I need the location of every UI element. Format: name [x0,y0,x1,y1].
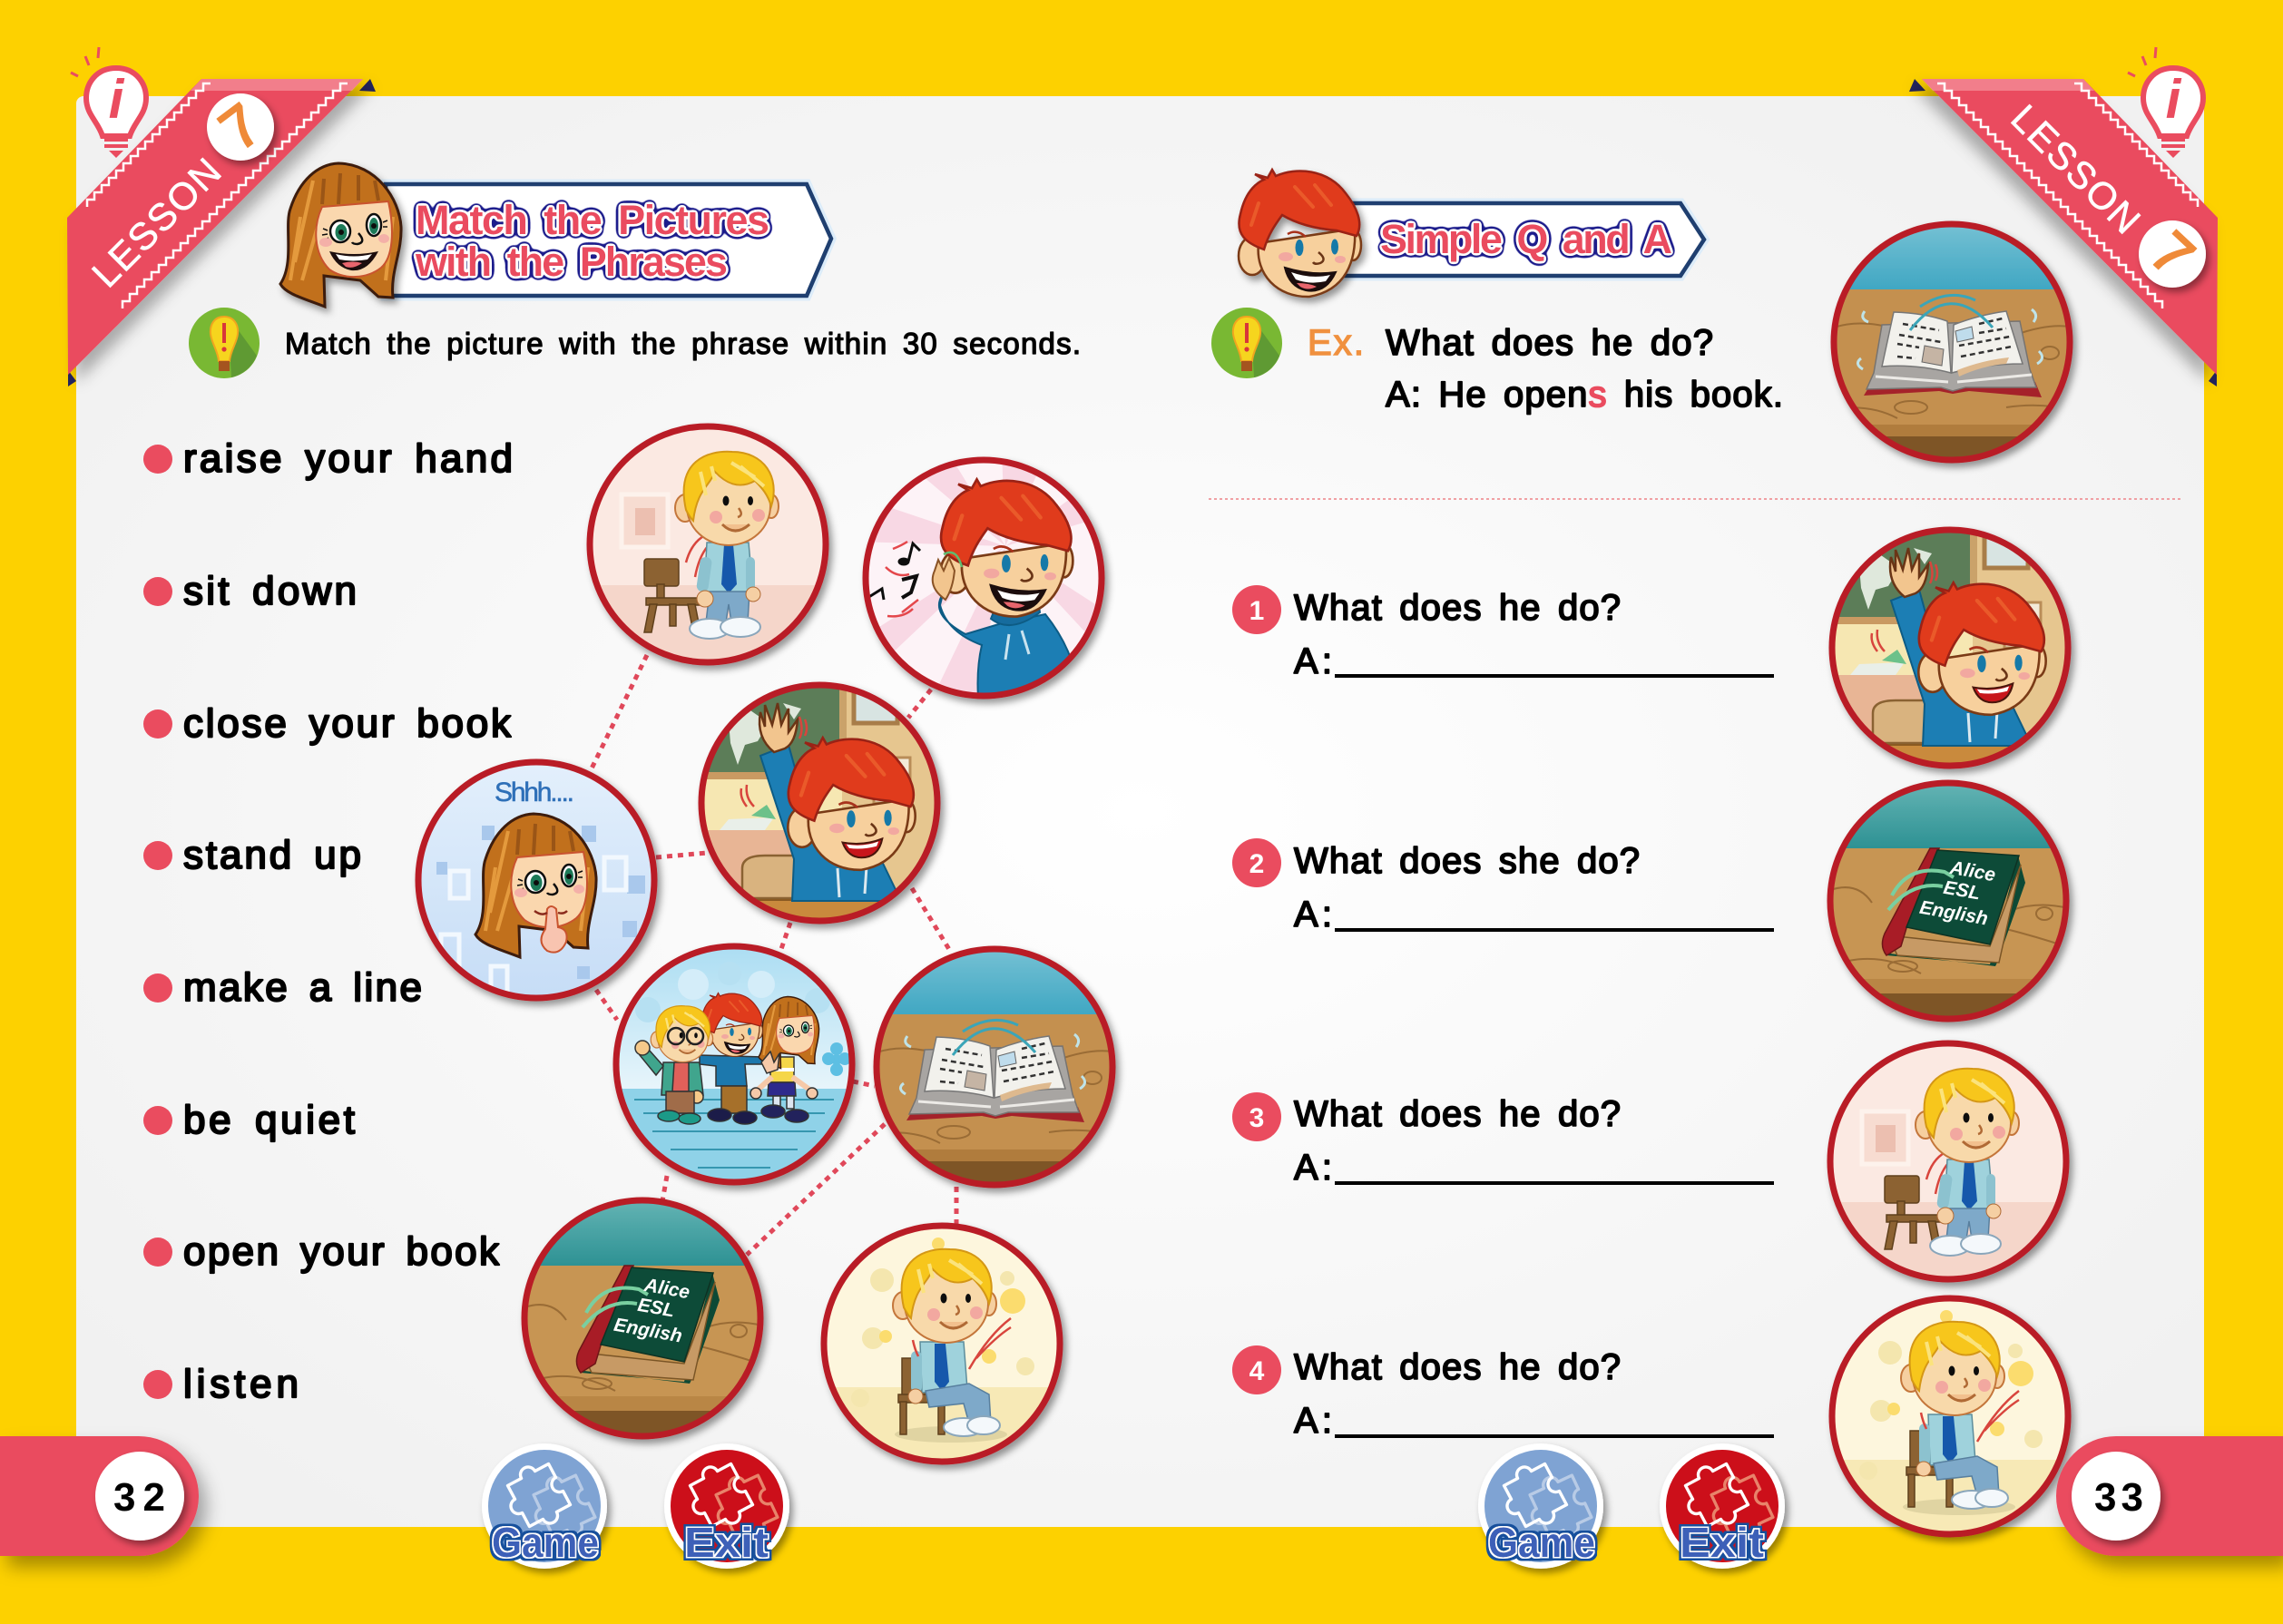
ribbon label: LESSON: LESSON [83,150,230,296]
ribbon label: LESSON: LESSON [2003,96,2149,242]
page number tab left: 32 [113,1475,165,1520]
phrase list [143,436,513,1406]
instruction text: Match the picture with the phrase within 30 seconds. [285,327,1081,360]
question 2: What does she do? [1294,841,1640,881]
button: exit left [664,1443,789,1569]
phrase: open your book: open your book [183,1229,500,1274]
phrase: listen: listen [183,1362,299,1406]
picture: closed book [515,1191,769,1450]
lesson number circle: 7 [2138,220,2207,289]
book title [1919,862,1994,925]
question 4: What does he do? [1294,1347,1621,1387]
question 3 [1232,1092,1774,1188]
phrase: be quiet: be quiet [183,1098,355,1142]
speech text: Shhh: Shhh.... [495,778,574,807]
button label: Game [492,1519,599,1566]
picture: boy raises hand [692,676,946,930]
icon: green hint bulb right [1211,308,1282,378]
icon: left info bulb: i [109,69,125,130]
question 1 [1232,585,1774,681]
question 3: What does he do? [1294,1094,1621,1134]
question 2: A: [1294,895,1332,934]
heading text: Match the Pictures [416,197,769,243]
picture: answer 4 sits down [1823,1289,2077,1551]
button: game left [482,1443,607,1569]
icon: right info bulb: i [2166,69,2182,130]
picture: boy listens [857,451,1111,705]
page number tab right [2056,1436,2283,1556]
question 1: What does he do? [1294,588,1621,628]
picture: answer 2 closed book [1821,774,2075,1032]
book title: ESL [636,1295,676,1321]
question 3: 3 [1249,1103,1264,1133]
button label: Game [1488,1519,1595,1566]
question 2: 2 [1249,849,1264,879]
phrase: close your book: close your book [183,701,512,746]
question 4 [1232,1345,1774,1441]
button: game right [1478,1443,1603,1569]
button label: Exit [1680,1519,1764,1566]
question 1: 1 [1249,596,1264,626]
question 4: 4 [1249,1356,1265,1386]
question 1: A: [1294,641,1332,681]
picture: boy stands up [581,417,835,676]
heading: simple q and a [1239,170,1704,297]
example question: A: He opens his book. [1386,375,1783,415]
example question: What does he do? [1386,323,1713,363]
dotted matching lines [592,655,956,1255]
heading text [415,197,769,285]
heading: match the pictures [280,163,831,307]
lesson number circle: 7 [208,92,273,162]
book title [613,1279,690,1343]
icon: green hint bulb left [189,308,260,378]
page number tab right: 33 [2094,1475,2143,1520]
question 2 [1232,838,1774,934]
phrase: stand up: stand up [183,833,361,877]
heading text: Simple Q and A [1380,216,1672,262]
picture: children make a line [607,937,861,1198]
question 4: A: [1294,1401,1332,1441]
book title: English [1918,897,1989,930]
heading text: with the Phrases [415,239,728,285]
left ribbon: lesson 7 [67,79,376,386]
picture: open book [867,940,1122,1198]
book title: Alice [1947,857,1997,885]
icon: girl head [280,163,401,307]
button label: Exit [684,1519,769,1566]
phrase: sit down: sit down [183,569,357,613]
right ribbon: lesson 7 [1909,79,2218,386]
picture: answer 1 raises hand [1823,521,2077,775]
button: exit right [1660,1443,1785,1569]
phrase: raise your hand: raise your hand [183,436,513,481]
picture: example open book [1825,215,2079,473]
book title: Alice [642,1275,691,1303]
question 3: A: [1294,1148,1332,1188]
book title: ESL [1942,877,1982,904]
page number tab left [0,1436,199,1556]
example question: Ex. [1308,323,1364,363]
icon: boy head [1239,170,1361,297]
phrase: make a line: make a line [183,965,422,1010]
picture: answer 3 stands up [1821,1034,2075,1293]
picture: boy sits down [815,1217,1069,1478]
icon: right info bulb [2128,47,2203,158]
icon: left info bulb [71,47,146,158]
example question [1308,323,1783,415]
book title: English [612,1315,683,1347]
picture: girl says be quiet [409,753,663,1007]
